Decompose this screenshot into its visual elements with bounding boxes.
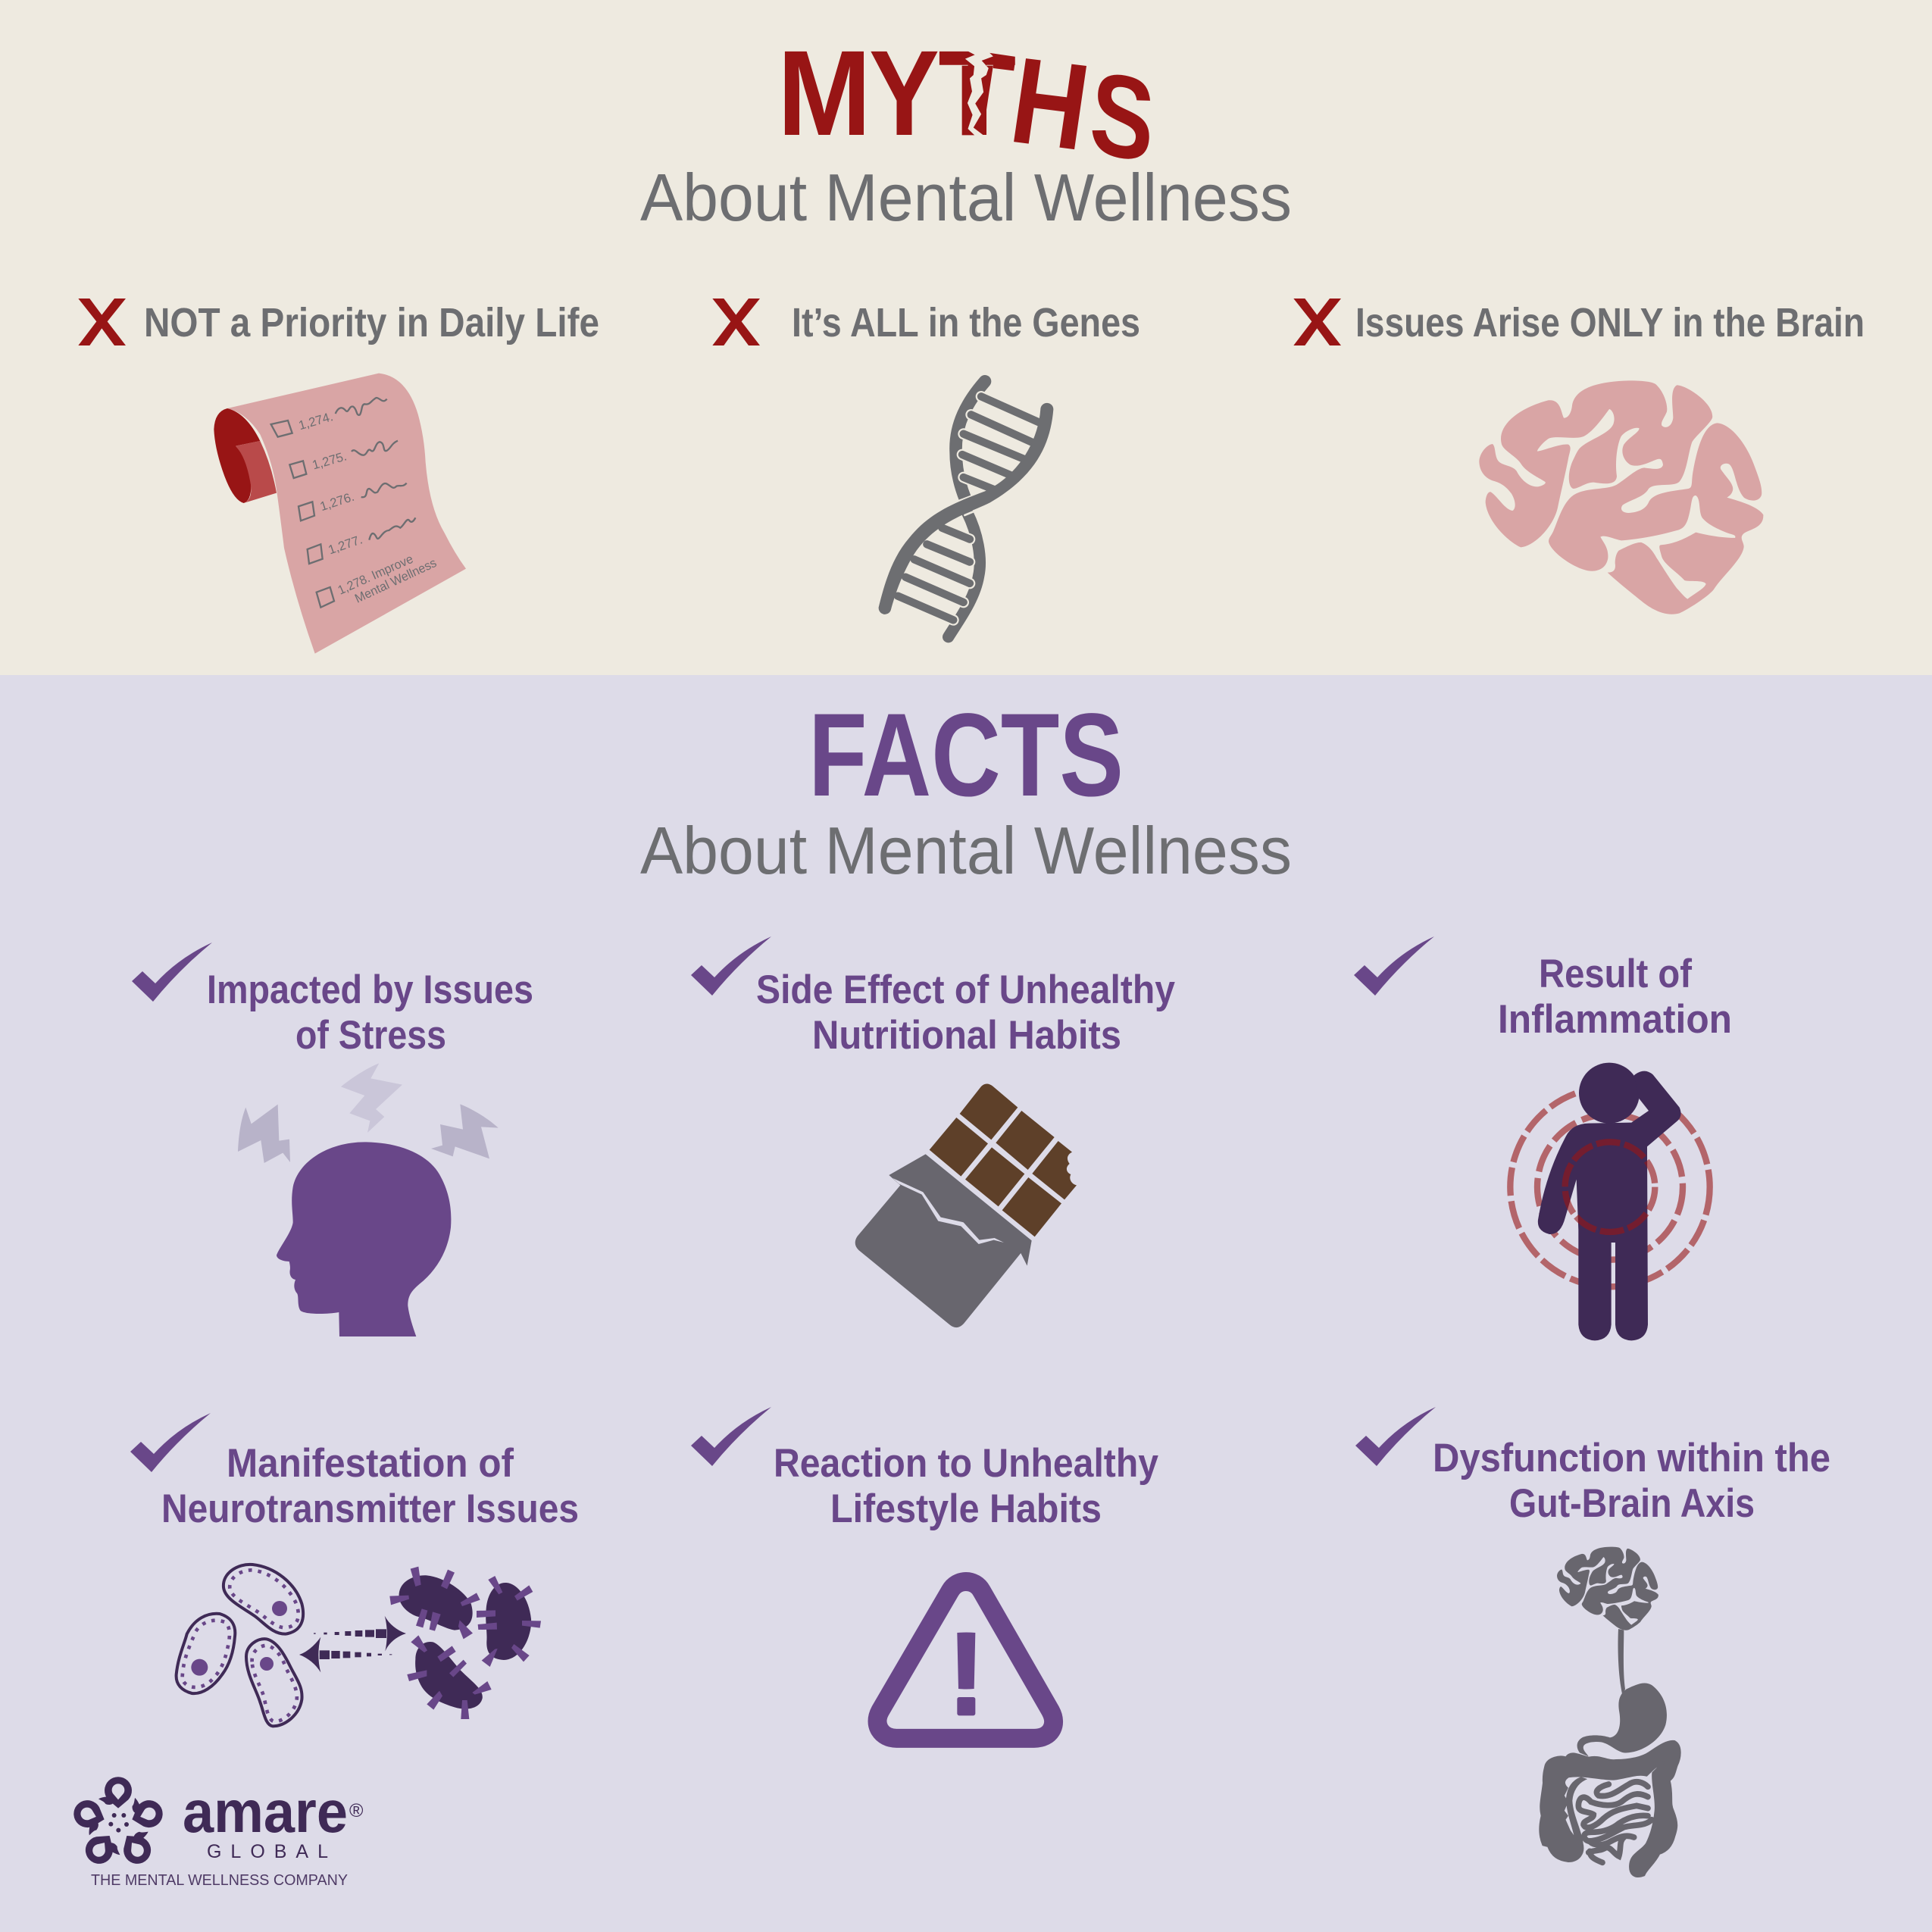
logo: amare global [68,1777,364,1889]
icon: brain [1479,380,1763,614]
fact 5: lifestyle [691,1407,1158,1738]
icon: head with lightning bolts [238,1063,499,1336]
icon: to-do list scroll: 1,274. [297,409,335,433]
title: MYTHS: Y [869,25,939,161]
fact 2: nutrition [691,936,1175,1327]
title: MYTHS: S [1086,45,1158,188]
fact 1 label: Impacted by Issues [207,968,533,1012]
icon: to-do list scroll: 1,278. Improve [336,552,415,598]
panel: facts [0,675,1932,1932]
fact 4 label: Manifestation of [227,1441,514,1486]
registered mark: ® [349,1800,364,1821]
title: MYTHS: T [938,25,1017,161]
title: FACTS: FACTS [808,689,1124,821]
myth 1: not a priority [78,299,599,345]
icon: gut-brain digestive system [1540,1547,1680,1877]
fact 3: inflammation [1354,936,1732,1340]
fact 1 label: of Stress [295,1013,446,1058]
fact 6 label: Dysfunction within the [1433,1436,1830,1480]
icon: check mark [1354,936,1434,996]
logo tagline: THE MENTAL WELLNESS COMPANY [91,1872,348,1889]
icon: to-do list scroll: 1,276. [318,489,356,514]
icon: person with inflammation rings [1510,1063,1710,1340]
myth 3: brain [1293,299,1865,345]
icon: to-do list scroll: 1,275. [311,449,349,473]
fact 1: stress [132,943,533,1336]
icon: check mark [1355,1407,1436,1466]
panel: myths [0,0,1932,675]
fact 4: neurotransmitters [130,1413,579,1726]
fact 6 label: Gut-Brain Axis [1509,1481,1755,1526]
icon: red x [1293,299,1341,345]
icon: dna helix [879,381,1053,637]
fact 2 label: Side Effect of Unhealthy [756,968,1175,1012]
fact 6: gut-brain axis [1355,1407,1830,1877]
icon: check mark [691,1407,771,1466]
icon: red x [78,299,126,345]
icon: check mark [132,943,212,1002]
logo wordmark: amare [183,1778,348,1845]
fact 3 label: Inflammation [1498,997,1732,1042]
title: MYTHS: M [777,25,871,161]
icon: check mark [130,1413,211,1472]
fact 3 label: Result of [1539,952,1692,996]
subtitle: about mental wellness (myths): About Mental Wellness [640,160,1292,235]
icon: red x [712,299,760,345]
myth 2: genes [712,299,1140,345]
title: MYTHS: H [1003,31,1097,176]
icon: to-do list scroll [214,374,466,654]
title: MYTHS [777,25,1158,188]
myth 1 label: NOT a Priority in Daily Life [144,300,599,345]
icon: check mark [691,936,771,996]
fact 2 label: Nutritional Habits [812,1013,1121,1058]
myth 2 label: It’s ALL in the Genes [792,300,1140,345]
icon: healthy and unhealthy neurons [177,1565,541,1726]
icon: chocolate bar [855,1083,1077,1327]
fact 4 label: Neurotransmitter Issues [161,1487,579,1531]
icon: to-do list scroll: Mental Wellness [352,555,439,606]
fact 5 label: Lifestyle Habits [830,1487,1102,1531]
logo subword: global: GLOBAL [207,1841,328,1862]
icon: to-do list scroll: 1,277. [327,532,364,557]
logo mark: flower [68,1777,166,1873]
subtitle: about mental wellness (facts): About Mental Wellness [640,813,1292,888]
fact 5 label: Reaction to Unhealthy [774,1441,1158,1486]
icon: warning triangle [877,1581,1054,1738]
